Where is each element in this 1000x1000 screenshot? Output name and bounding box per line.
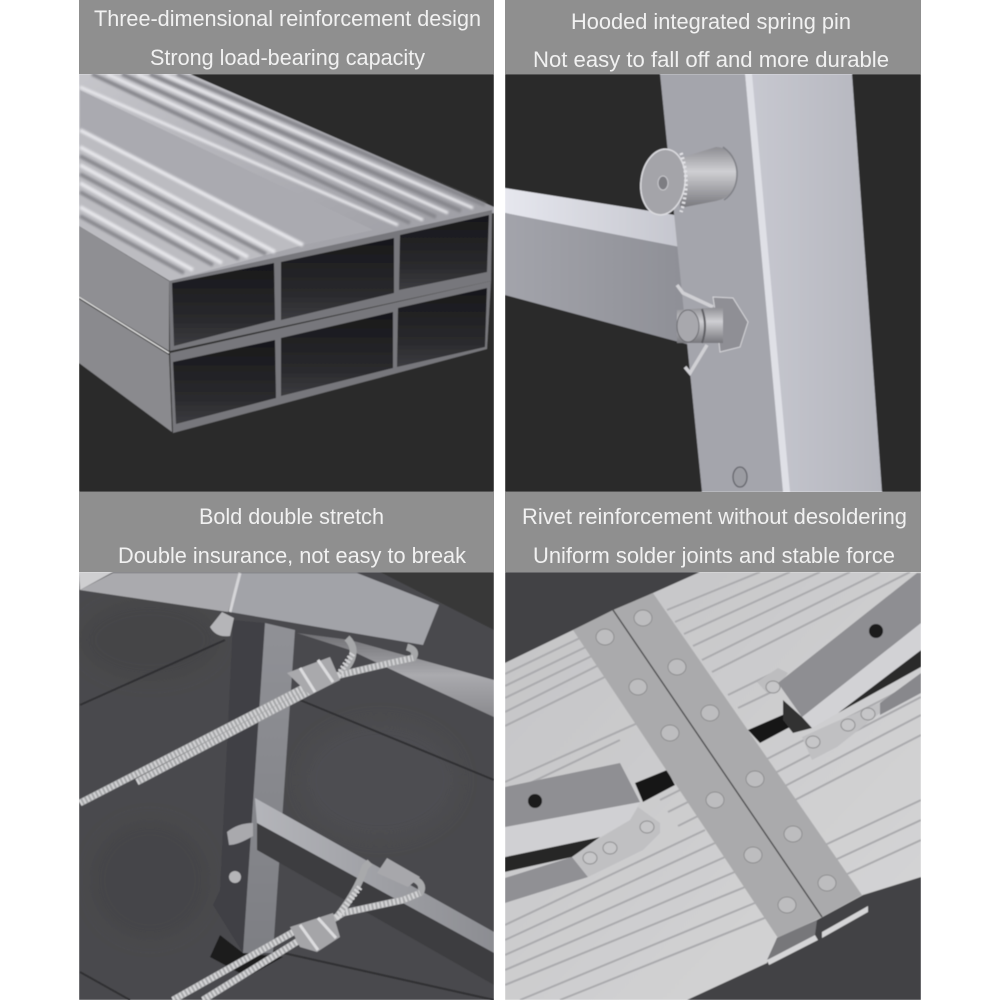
joint plate	[573, 593, 862, 938]
leg	[210, 620, 295, 977]
lower wire rope	[173, 862, 422, 1000]
panel 2 header band	[505, 0, 921, 74]
panel 4 heading: Uniform solder joints and stable force	[533, 543, 895, 568]
spring pin knob	[637, 146, 737, 218]
panel 1 photo: stacked aluminium profiles	[79, 74, 494, 492]
panel 2 heading: Not easy to fall off and more durable	[533, 47, 889, 72]
panel 4 photo: hinge plate and rivets	[505, 572, 921, 1000]
panel 3 photo: ladder leg and wire rope	[79, 572, 494, 1000]
panel: three-dimensional reinforcement	[79, 0, 494, 492]
panel 3 header band	[79, 492, 494, 572]
upper cable clamps	[287, 657, 340, 695]
plate rivets	[596, 610, 836, 913]
black slots	[635, 713, 790, 802]
lower cable ferrule	[377, 858, 420, 887]
right folding arm	[757, 573, 921, 760]
small rivet hole	[733, 467, 747, 487]
panel: hooded spring pin	[505, 0, 921, 492]
upper hollow chambers	[172, 215, 489, 346]
ribbed top surface	[79, 74, 494, 281]
panel 2 photo: ladder post and pin	[505, 74, 921, 492]
lower rail	[255, 798, 494, 985]
ribbed board	[505, 572, 921, 1000]
left side faces	[79, 226, 172, 432]
hinge under plate	[767, 906, 868, 965]
wing nut	[677, 285, 748, 373]
panel 3 heading	[118, 504, 467, 568]
upper tube rail	[297, 633, 494, 717]
lower cable clamps	[290, 913, 340, 952]
panel 3 heading: Bold double stretch	[199, 504, 384, 529]
concrete floor	[79, 572, 494, 1000]
upper wire rope	[80, 638, 415, 803]
seat box end	[79, 572, 439, 645]
panel 2 heading: Hooded integrated spring pin	[571, 9, 851, 34]
panel: double stretch cable	[79, 492, 494, 1000]
concrete ground	[505, 572, 921, 1000]
panel 4 header band	[505, 492, 921, 572]
panel 3 heading: Double insurance, not easy to break	[118, 543, 467, 568]
panel 4 heading: Rivet reinforcement without desoldering	[522, 504, 907, 529]
left folding arm	[505, 763, 660, 903]
panel: rivet reinforcement	[505, 492, 921, 1000]
lower hollow chambers	[173, 288, 487, 424]
rivets on leg	[210, 612, 253, 883]
panel 4 heading	[522, 504, 907, 568]
panel 2 heading	[533, 9, 889, 72]
panel 1 heading: Three-dimensional reinforcement design	[94, 6, 481, 31]
panel 1 header band	[79, 0, 494, 74]
post	[660, 74, 882, 492]
front faces	[169, 210, 492, 433]
crossbar	[505, 188, 690, 345]
panel 1 heading	[94, 6, 481, 70]
panel 1 heading: Strong load-bearing capacity	[150, 45, 425, 70]
